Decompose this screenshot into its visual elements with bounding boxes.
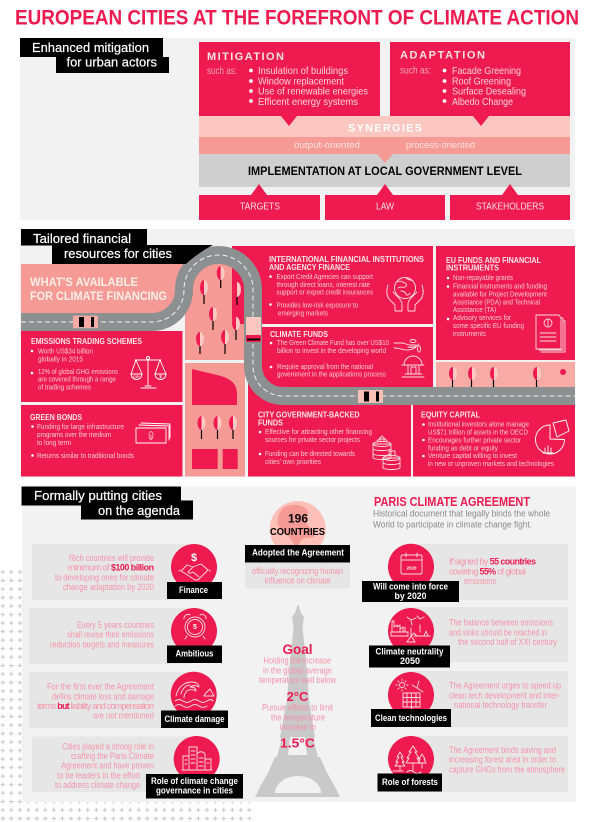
row: ambitious: Ambitious: [176, 648, 214, 658]
panel: city government-backed funds: sources for private sector projects: [265, 437, 360, 444]
row: climate damage: Climate damage: [164, 714, 225, 724]
panel: emissions trading schemes: [21, 331, 182, 402]
text: paris intro: [373, 509, 550, 529]
panel: eu funds: instruments: [453, 331, 486, 338]
row: clean technologies: Clean technologies: [375, 713, 447, 723]
row: climate damage: are not mentioned: [93, 711, 154, 721]
icon: solar panel and wind: [396, 679, 423, 710]
box: mitigation: MITIGATION: [207, 51, 284, 63]
goal text: in the global average: [263, 665, 332, 675]
box: adaptation: ADAPTATION: [400, 50, 485, 62]
goal text: the temperature: [271, 712, 325, 722]
row: role of forests: Role of forests: [382, 777, 438, 787]
panel: eu funds: [436, 246, 575, 360]
heading: formally putting cities: on the agenda: [98, 503, 181, 518]
row: role of forests: [378, 736, 568, 792]
text: officially recognizing: [245, 563, 350, 588]
label: adopted the agreement: Adopted the Agreement: [252, 548, 344, 558]
panel: green bonds: programs over the medium: [37, 432, 111, 439]
panel: eu funds: Advisory services for: [453, 315, 512, 322]
icon: factory and wind on balance: [391, 616, 430, 642]
panel: climate funds: billion to invest in the developing world: [277, 348, 386, 355]
icon: handshake with dollar: [179, 564, 210, 580]
panel: equity capital: Venture capital willing to invest: [428, 453, 517, 460]
strip: roadside trees: [436, 362, 575, 388]
panel: emissions trading schemes: 12% of global GHG emissions: [38, 369, 118, 376]
row: role of forests: capture GHGs from the atmosphere: [449, 764, 565, 774]
goal text: Holding the increase: [264, 656, 331, 666]
icon: calendar 2020: [401, 553, 422, 574]
panel: equity capital: [413, 405, 575, 476]
box: adaptation: [390, 42, 570, 116]
panel: international financial institutions: support or export credit insurances: [276, 290, 373, 297]
box: stakeholders: STAKEHOLDERS: [476, 200, 544, 212]
panel: tailored financial resources: [20, 229, 575, 477]
row: will come into force: by 2020: [394, 591, 427, 601]
row: will come into force: [362, 544, 568, 602]
heading: tailored financial resources: [21, 229, 213, 264]
panel: city government-backed funds: Effective for attracting other financing: [265, 429, 372, 436]
panel: formally putting cities on the agenda: [22, 486, 576, 802]
box: mitigation: such as:: [207, 66, 237, 77]
panel: eu funds: Assistance (TA): [453, 307, 496, 314]
car: lower road: [358, 390, 383, 403]
road: [21, 255, 575, 396]
row: finance: [32, 544, 222, 600]
goal text: Pursue efforts to limit: [262, 703, 333, 713]
box: stakeholders: [450, 184, 570, 220]
heading: formally putting cities: [22, 486, 193, 520]
icon: forest: [393, 746, 426, 774]
panel: equity capital: in new or unproven markets and technologies: [428, 461, 554, 468]
row: ambitious: [29, 608, 222, 664]
panel: eu funds: available for Project Development: [453, 292, 547, 299]
icon: globe in hands: [387, 278, 423, 311]
eiffel tower: [255, 605, 340, 797]
text: officially recognizing: influence on climate: [264, 576, 331, 586]
goal text: Goal: [282, 642, 312, 657]
panel: eu funds: Assistance (PDA) and Technical: [453, 299, 540, 306]
band: orientation: process-oriented: [406, 139, 475, 150]
panel: enhanced mitigation: [20, 38, 575, 220]
icon: banknotes: [136, 423, 170, 443]
box: law: LAW: [376, 200, 394, 212]
row: will come into force: emissions: [464, 576, 496, 586]
icon: hand and bank: [394, 340, 424, 377]
row: finance: to developing ones for climate: [55, 572, 154, 582]
panel: green bonds: to long term: [37, 440, 71, 447]
row: climate damage: terms but liability and compensation: [37, 701, 154, 711]
panel: international financial institutions: AND AGENCY FINANCE: [269, 262, 350, 272]
band: implementation: [199, 154, 570, 187]
icon: pie chart: [536, 420, 569, 454]
row: role of climate change governance: Cities played a strong role in: [62, 742, 154, 752]
heading: enhanced mitigation: for urban actors: [66, 54, 157, 70]
row: finance: Finance: [179, 585, 208, 595]
panel: eu funds: EU FUNDS AND FINANCIAL: [446, 255, 541, 265]
goal text: temperature well below: [259, 675, 336, 685]
goal text: 2°C: [287, 689, 309, 704]
row: finance: $: [191, 552, 197, 564]
icon: balance scale: [131, 356, 166, 388]
panel: equity capital: US$71 trillion of assets in the OECD: [428, 430, 528, 437]
panel: international financial institutions: emerging markets: [278, 311, 328, 318]
heading: enhanced mitigation: [20, 38, 169, 73]
block: inner park with trees: [185, 262, 245, 360]
heading: tailored financial resources: Tailored financial: [33, 231, 131, 246]
panel: emissions trading schemes: CO²: [133, 375, 141, 379]
box: targets: TARGETS: [240, 200, 280, 212]
box: mitigation: [199, 42, 380, 116]
goal text: increase to: [280, 722, 316, 732]
box: adaptation: Facade Greening: [452, 66, 521, 77]
trees in park: [196, 266, 241, 354]
panel: city government-backed funds: Funding can be directed towards: [265, 451, 355, 458]
row: climate neutrality: The balance between emissions: [449, 618, 553, 628]
box: mitigation: Window replacement: [258, 76, 344, 88]
row: role of climate change governance: Role of climate change: [151, 776, 238, 786]
row: role of climate change governance: crafting the Paris Climate: [71, 751, 154, 761]
panel: green bonds: GREEN BONDS: [30, 412, 82, 422]
panel: emissions trading schemes: $: [159, 374, 162, 379]
panel: eu funds: some specific EU funding: [453, 323, 524, 330]
panel: lower city block: [185, 363, 245, 476]
row: climate damage: [29, 672, 228, 728]
panel: green bonds: Funding for large infrastructure: [37, 424, 124, 431]
box: mitigation: Insulation of buildings: [258, 66, 348, 77]
row: role of climate change governance: [32, 736, 243, 798]
box: adaptation: such as:: [400, 66, 431, 76]
decorative plus pattern: [0, 570, 255, 822]
box: targets: [199, 184, 320, 220]
band: orientation: output-oriented: [294, 139, 360, 150]
panel: international financial institutions: Provides low-risk exposure to: [276, 303, 358, 310]
panel: climate funds: CLIMATE FUNDS: [270, 329, 328, 339]
row: clean technologies: The Agreement urges to speed up: [449, 681, 561, 691]
row: will come into force: 2020: [406, 566, 417, 570]
row: ambitious: Every 5 years countries: [77, 620, 154, 630]
truck: [246, 317, 261, 342]
row: role of forests: increasing forest area in order to: [449, 755, 556, 765]
box: law: [325, 184, 445, 220]
panel: emissions trading schemes: globally in 2015: [38, 356, 83, 364]
icon: wave: [175, 682, 214, 708]
row: ambitious: reduction targets and measures: [50, 639, 154, 649]
heading: formally putting cities: Formally putting cities: [34, 488, 162, 503]
box: adaptation: Albedo Change: [452, 97, 513, 108]
row: role of climate change governance: to address climate change: [55, 780, 140, 790]
row: will come into force: Will come into force: [373, 582, 448, 592]
band: synergies: [199, 116, 570, 137]
text: officially recognizing: officially recognizing human: [252, 566, 343, 576]
arrow: mitigation to synergies: [281, 116, 297, 126]
row: will come into force: covering 55% of global: [449, 566, 526, 576]
panel: equity capital: Encourages further private sector: [428, 437, 522, 444]
panel: eu funds: Financial instruments and funding: [453, 284, 547, 291]
heading: paris climate agreement: PARIS CLIMATE AGREEMENT: [374, 494, 530, 509]
panel: climate funds: Require approval from the national: [277, 364, 373, 371]
panel: what's available: FOR CLIMATE FINANCING: [30, 291, 167, 303]
row: role of climate change governance: Agreement and have proven: [61, 761, 154, 771]
box: mitigation: Efficent energy systems: [258, 97, 358, 108]
panel: equity capital: Institutional investors alone manage: [428, 422, 529, 429]
panel: international financial institutions: INTERNATIONAL FINANCIAL INSTITUTIONS: [269, 254, 424, 264]
panel: green bonds: Returns similar to traditional bonds: [37, 453, 134, 460]
row: clean technologies: national technology transfer: [454, 700, 547, 710]
text: paris intro: Historical document that legally binds the whole: [373, 509, 550, 519]
row: climate neutrality: 2050: [400, 656, 420, 666]
band: synergies: SYNERGIES: [348, 122, 422, 134]
panel: what's available: [21, 264, 183, 316]
goal text: 1.5°C: [280, 736, 316, 751]
box: mitigation: Use of renewable energies: [258, 86, 368, 98]
car: left road: [73, 316, 98, 328]
box: adaptation: Surface Desealing: [452, 86, 526, 98]
panel: emissions trading schemes: of trading schemes: [38, 384, 91, 392]
row: climate neutrality: Climate neutrality: [376, 646, 444, 656]
row: will come into force: If signed by 55 countries: [449, 557, 536, 567]
row: climate neutrality: the second half of XXI century: [458, 637, 557, 647]
icon: coin stacks: [373, 436, 400, 470]
icon: document stack: [536, 315, 565, 352]
panel: eu funds: INSTRUMENTS: [446, 263, 499, 273]
heading: enhanced mitigation: Enhanced mitigation: [32, 40, 149, 55]
panel: international financial institutions: [232, 246, 433, 324]
icon: alarm clock: [184, 614, 206, 639]
band: implementation: IMPLEMENTATION AT LOCAL GOVERNMENT LEVEL: [248, 166, 522, 178]
globe: 196 countries: 196: [288, 512, 308, 526]
panel: equity capital: funding as debt or equity: [428, 445, 498, 452]
panel: city government-backed funds: CITY GOVERNMENT-BACKED: [258, 410, 360, 420]
globe: 196 countries: COUNTRIES: [270, 526, 325, 538]
panel: emissions trading schemes: EMISSIONS TRADING SCHEMES: [31, 336, 142, 346]
row: climate neutrality: and sinks should be reached in: [449, 627, 547, 637]
row: role of forests: The Agreement binds saving and: [449, 745, 556, 755]
panel: green bonds: [21, 405, 182, 476]
panel: international financial institutions: through direct loans, interest rate: [276, 282, 370, 289]
row: climate neutrality: [369, 607, 568, 668]
panel: city government-backed funds: FUNDS: [258, 418, 283, 428]
panel: climate funds: The Green Climate Fund has over US$10: [277, 340, 389, 347]
icon: city buildings: [182, 747, 212, 770]
row: role of climate change governance: governance in cities: [156, 786, 233, 796]
heading: tailored financial resources: resources for cities: [64, 246, 172, 261]
panel: city government-backed funds: cities' own priorities: [265, 459, 321, 466]
row: role of climate change governance: to be leaders in the effort: [57, 770, 140, 780]
box: adaptation: Roof Greening: [452, 76, 511, 88]
row: clean technologies: [371, 671, 568, 727]
panel: city government-backed funds: [248, 370, 411, 476]
panel: emissions trading schemes: are covered through a range: [38, 377, 116, 384]
row: ambitious: shall revise their emissions: [67, 630, 154, 640]
globe: 196 countries: [270, 501, 326, 557]
goal text: [259, 642, 336, 751]
panel: climate funds: [262, 327, 433, 387]
panel: equity capital: EQUITY CAPITAL: [421, 410, 480, 420]
text: paris intro: World to participate in climate change fight.: [373, 519, 532, 529]
row: finance: Rich countries will provide: [69, 553, 154, 563]
row: ambitious: 5: [193, 624, 197, 631]
panel: emissions trading schemes: Worth US$34 billion: [38, 348, 93, 356]
band: orientation: [199, 137, 570, 154]
row: climate damage: defins climate loss and damage: [52, 691, 154, 701]
row: finance: change adaptation by 2020: [63, 582, 154, 592]
row: climate damage: For the first ever the Agreement: [47, 682, 154, 692]
arrow: adaptation to synergies: [473, 116, 489, 126]
row: finance: minimum of $100 billion: [68, 563, 154, 573]
label: adopted the agreement: [245, 545, 350, 562]
panel: climate funds: government in the applications process: [277, 372, 386, 379]
row: clean technologies: clean tech development and inter-: [449, 690, 560, 700]
panel: what's available: WHAT'S AVAILABLE: [30, 277, 138, 289]
panel: international financial institutions: Export Credit Agencies can support: [276, 274, 373, 281]
panel: eu funds: Non-repayable grants: [453, 275, 513, 282]
